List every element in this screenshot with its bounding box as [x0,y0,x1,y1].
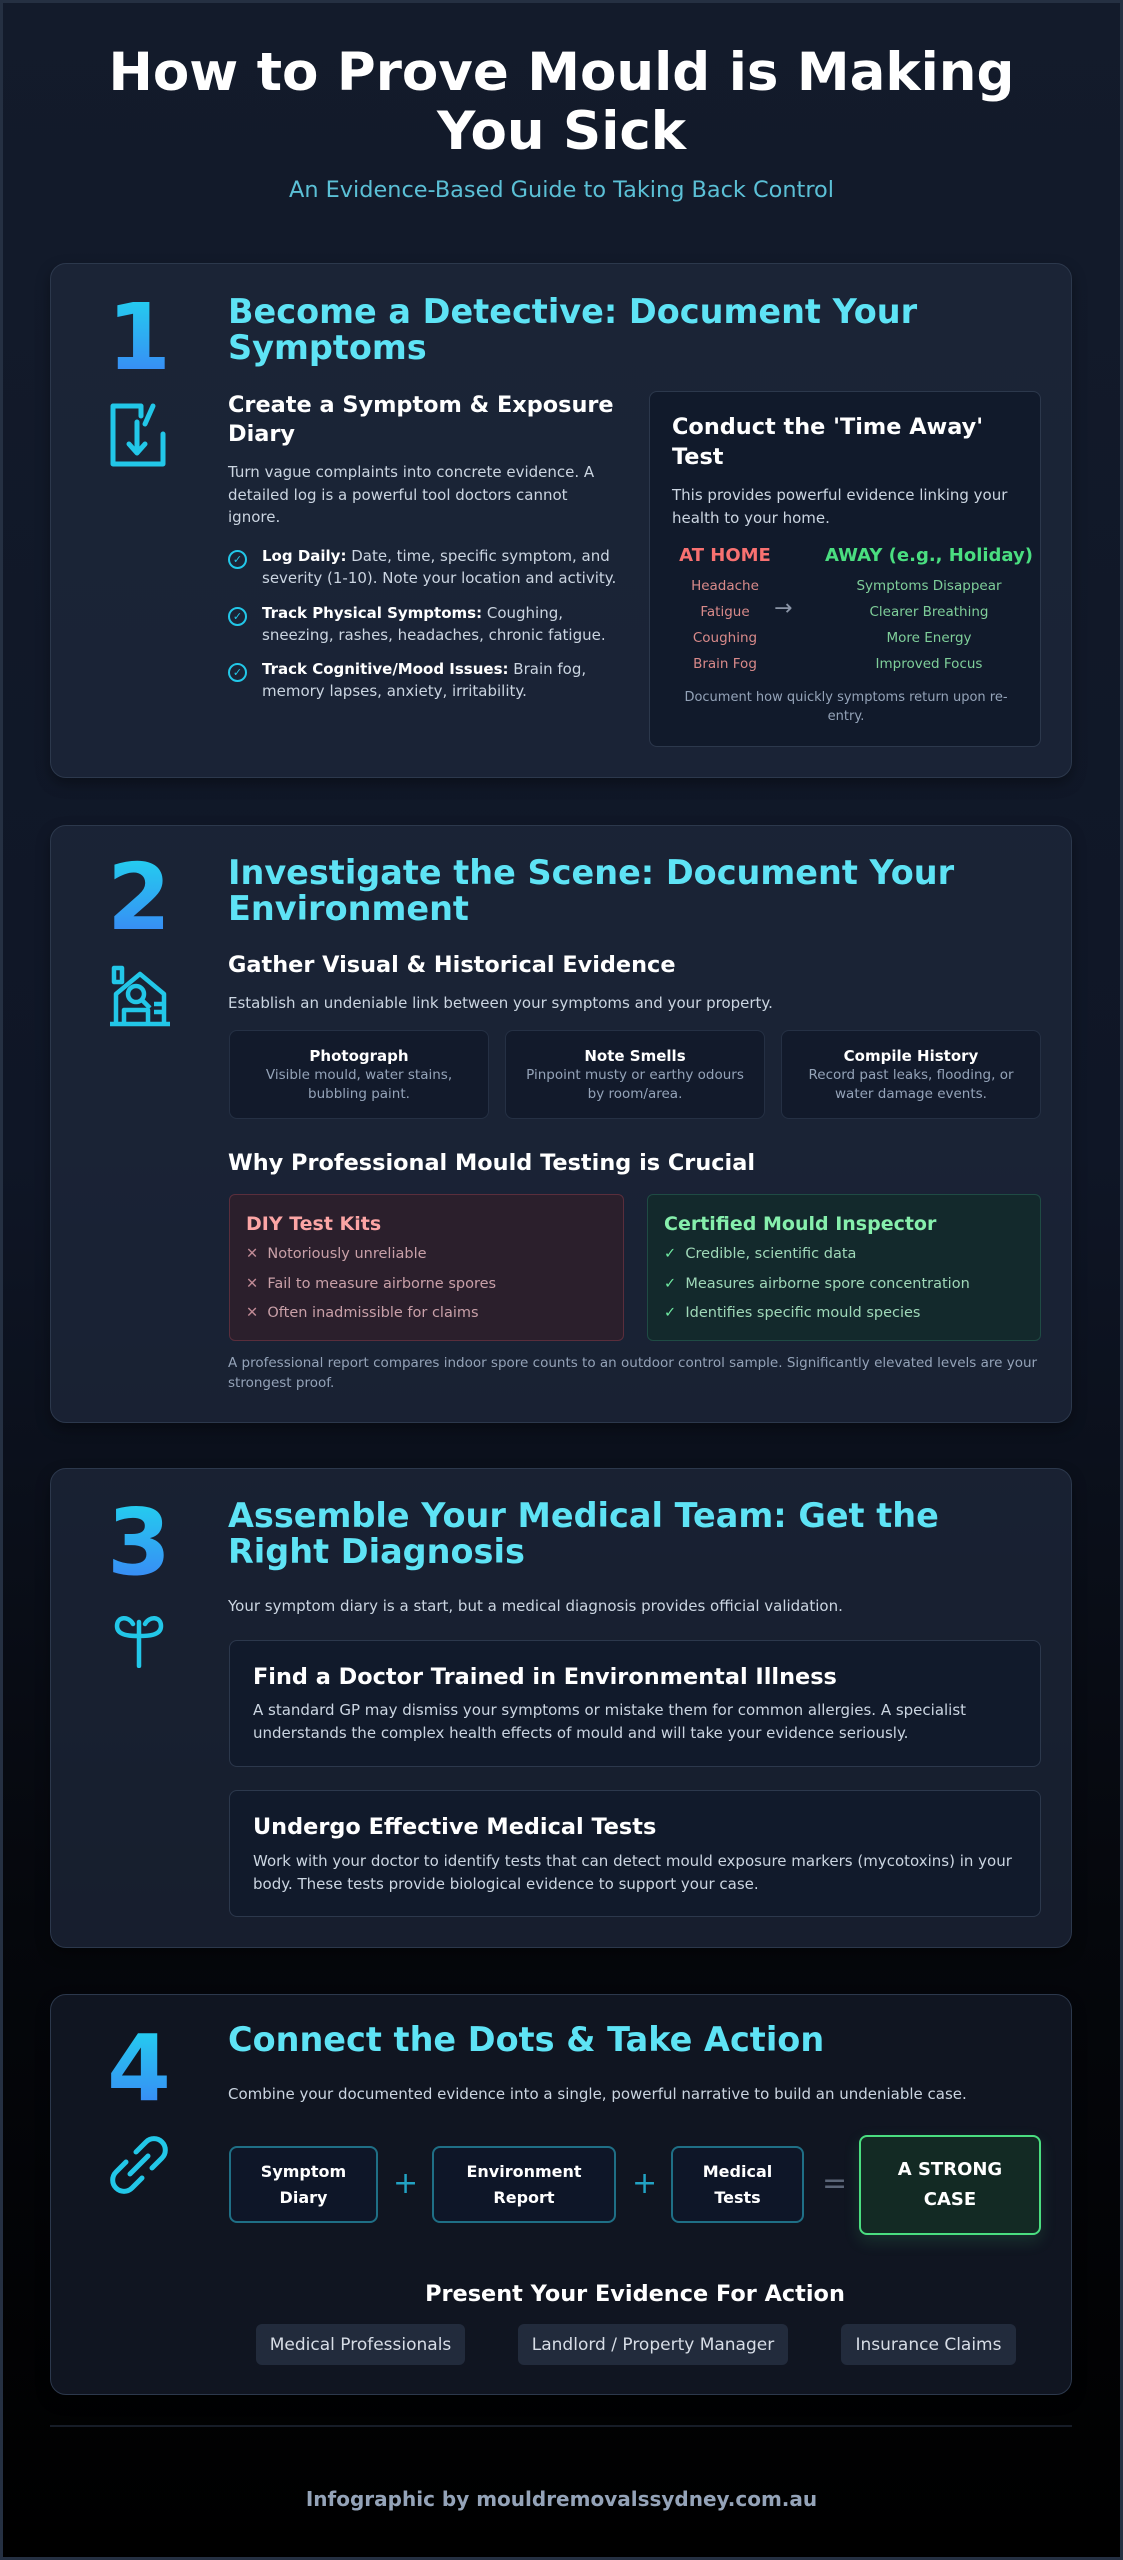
icon: link [110,2136,168,2194]
heading 3: Assemble Your Medical Team: Get the [228,1496,939,1535]
box: find a doctor: A standard GP may dismiss your symptoms or mistake them for common allergies. A specialist understands the complex health effects of mould and will take your evidence seriously. [253,1701,966,1742]
equation: = [822,2166,847,2201]
box: certified inspector: ✓ Identifies specific mould species [664,1305,920,1321]
away column: Symptoms Disappear [856,578,1002,594]
box: medical tests: Tests [714,2188,761,2206]
card: note smells: by room/area. [588,1086,682,1102]
card: compile history: Compile History [844,1047,978,1065]
icon: diary [110,404,166,466]
heading 2: Environment [228,889,469,928]
arrow: → [774,596,792,621]
number 4: 4 [107,2015,171,2122]
at home column: Fatigue [700,604,750,620]
equation [229,2135,1045,2245]
box: environment report: Environment [466,2162,582,2180]
diary heading: Diary [228,421,295,447]
box: certified inspector: Certified Mould Inspector [664,1213,936,1235]
card: photograph: bubbling paint. [308,1086,410,1102]
heading 1: Become a Detective: Document Your [228,292,917,331]
box: DIY kits: DIY Test Kits [246,1213,381,1235]
box: DIY kits: ✕ Often inadmissible for claims [246,1305,479,1321]
number 3 [79,1497,199,1589]
number 2 [79,852,199,944]
card: compile history: Record past leaks, flooding, or [808,1067,1014,1083]
box: time away test: Conduct the 'Time Away' [672,414,983,440]
title: You Sick [437,101,686,162]
chip: medical professionals [256,2324,465,2365]
box: time away test: This provides powerful evidence linking your health to your home. [672,486,1007,527]
diary heading: Create a Symptom & Exposure [228,392,614,418]
away column: Improved Focus [876,656,982,672]
heading 1: Symptoms [228,328,427,367]
box: certified inspector: ✓ Measures airborne spore concentration [664,1276,970,1292]
chip: insurance [841,2324,1016,2365]
card: photograph: Visible mould, water stains, [266,1067,452,1083]
bullet: log daily: Log Daily: Date, time, specific symptom, and severity (1-10). Note your location and activity. [262,547,616,587]
title [109,42,1014,162]
panel: step 3 [50,1468,1072,1948]
number 3: 3 [107,1489,171,1596]
note: Document how quickly symptoms return upon re-entry. [684,690,1008,724]
why testing heading: Why Professional Mould Testing is Crucial [228,1150,755,1176]
heading 3: Right Diagnosis [228,1532,525,1571]
at home column: Headache [691,578,759,594]
away column: AWAY (e.g., Holiday) [825,545,1033,566]
card: note smells: Pinpoint musty or earthy odours [526,1067,744,1083]
at home column: AT HOME [679,545,771,566]
footnote: A professional report compares indoor spore counts to an outdoor control sample. Significantly elevated levels are your strongest proof. [228,1355,1037,1390]
box: medical tests [229,1790,1041,1917]
chip: medical professionals: Medical Professionals [270,2334,451,2354]
box: environment report [432,2146,616,2223]
footer: Infographic by mouldremovalssydney.com.au [306,2487,817,2511]
icon: stethoscope [114,1616,164,1668]
card: note smells [505,1030,765,1119]
heading 2 [228,853,954,928]
panel: step 4 [50,1994,1072,2395]
diary text: Turn vague complaints into concrete evidence. A detailed log is a powerful tool doctors cannot ignore. [228,463,594,526]
box: find a doctor: Find a Doctor Trained in Environmental Illness [253,1664,837,1690]
box: DIY kits: ✕ Fail to measure airborne spores [246,1276,496,1292]
away column: Clearer Breathing [870,604,988,620]
card: photograph: Photograph [309,1047,409,1065]
bullet: physical: ✓ [233,610,242,623]
panel: step 1 [50,263,1072,778]
box: symptom diary: Diary [280,2188,327,2206]
away column [825,545,1033,672]
at home column: Coughing [693,630,757,646]
box: medical tests: Undergo Effective Medical Tests [253,1814,656,1840]
icon: house [110,966,170,1026]
number 1 [79,292,199,384]
box: time away test: Test [672,444,724,470]
bullet: physical: Track Physical Symptoms: Coughing, sneezing, rashes, headaches, chronic fatigue. [262,604,606,644]
intro text: Combine your documented evidence into a single, powerful narrative to build an undeniable case. [228,2085,967,2103]
bullet: log daily: ✓ [233,553,242,566]
box: strong case: A STRONG [898,2159,1002,2180]
box: certified inspector: ✓ Credible, scientific data [664,1246,856,1262]
box: strong case [859,2135,1041,2235]
title: How to Prove Mould is Making [109,42,1014,103]
card: note smells: Note Smells [584,1047,686,1065]
box: certified inspector [647,1194,1041,1341]
chip: landlord [518,2324,788,2365]
subtitle: An Evidence-Based Guide to Taking Back Control [289,177,834,203]
bullet: cognitive: ✓ [233,666,242,679]
gather heading: Gather Visual & Historical Evidence [228,952,676,978]
heading 4: Connect the Dots & Take Action [228,2020,824,2059]
heading 3 [228,1496,939,1571]
heading 2: Investigate the Scene: Document Your [228,853,954,892]
at home column [679,545,771,672]
box: strong case: CASE [924,2189,976,2210]
card: compile history [781,1030,1041,1119]
number 4 [79,2023,199,2115]
panel: step 2 [50,825,1072,1423]
chip: insurance: Insurance Claims [856,2334,1001,2354]
box: DIY kits: ✕ Notoriously unreliable [246,1246,427,1262]
diary heading [228,392,614,447]
away column: More Energy [886,630,972,646]
bullet: cognitive: Track Cognitive/Mood Issues: Brain fog, memory lapses, anxiety, irritability. [262,660,586,700]
number 2: 2 [107,844,171,951]
box: time away test [649,391,1041,747]
gather text: Establish an undeniable link between your symptoms and your property. [228,994,773,1012]
card: compile history: water damage events. [835,1086,987,1102]
equation: + [632,2166,657,2201]
box: DIY kits [229,1194,624,1341]
box: symptom diary: Symptom [261,2162,346,2180]
chip: landlord: Landlord / Property Manager [532,2334,774,2354]
present heading: Present Your Evidence For Action [425,2281,845,2307]
box: environment report: Report [493,2188,555,2206]
heading 1 [228,292,918,367]
box: medical tests: Medical [703,2162,772,2180]
at home column: Brain Fog [693,656,757,672]
number 1: 1 [107,284,171,391]
intro text: Your symptom diary is a start, but a medical diagnosis provides official validation. [228,1597,843,1615]
card: photograph [229,1030,489,1119]
box: symptom diary [229,2146,378,2223]
equation: + [393,2166,418,2201]
box: medical tests [671,2146,804,2223]
box: find a doctor [229,1640,1041,1767]
box: medical tests: Work with your doctor to identify tests that can detect mould exposure markers (mycotoxins) in your body. These tests provide biological evidence to support your case. [253,1852,1012,1893]
